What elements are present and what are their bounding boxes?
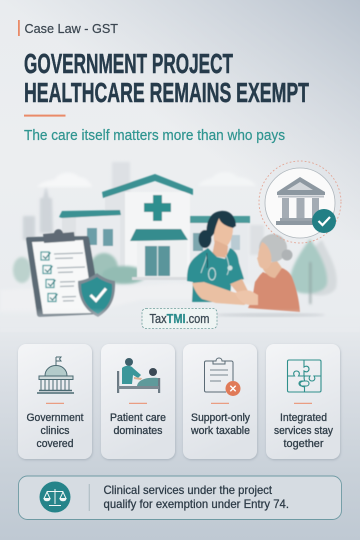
- title underline accent: [24, 115, 66, 117]
- banner text: [104, 483, 289, 511]
- label: Support-only: [191, 412, 250, 424]
- label: Patient care: [110, 412, 166, 424]
- label: work taxable: [190, 425, 250, 437]
- white circle: [265, 168, 335, 238]
- label: [26, 412, 84, 450]
- government badge: [259, 161, 341, 243]
- banner text: qualify for exemption under Entry 74.: [104, 497, 289, 511]
- conclusion banner: [18, 476, 342, 520]
- banner text: Clinical services under the project: [104, 483, 273, 497]
- shield: [78, 273, 115, 317]
- title: [24, 48, 309, 108]
- divider: [211, 403, 229, 404]
- hospital: main block: [102, 174, 193, 280]
- label: [274, 412, 333, 450]
- label: covered: [36, 438, 74, 450]
- card: Government clinics covered: [18, 344, 92, 459]
- divider: [129, 403, 147, 404]
- label: clinics: [40, 425, 70, 437]
- check badge: [312, 209, 336, 233]
- card: Support-only work taxable: [183, 344, 257, 459]
- nurse: [187, 211, 250, 305]
- ground path: [0, 283, 260, 312]
- temple icon: [276, 177, 325, 225]
- divider: [294, 403, 312, 404]
- label: Integrated: [280, 412, 327, 424]
- label: services stay: [274, 425, 333, 437]
- hospital: entrance: [130, 229, 190, 280]
- subtitle: The care itself matters more than who pays: [24, 127, 285, 144]
- icon: clipboard with cross: [204, 358, 240, 396]
- icon: scales of justice: [40, 482, 70, 512]
- hospital: left wing: [59, 210, 121, 272]
- bushes: [90, 253, 146, 284]
- label: Government: [26, 412, 84, 424]
- icon: government building: [37, 357, 74, 393]
- bottom fade: [0, 308, 360, 332]
- tree: [290, 239, 337, 304]
- hospital: right wing: [187, 216, 250, 280]
- brand label: TaxTMI.com: [142, 308, 217, 328]
- card: Patient care dominates: [101, 344, 175, 459]
- card: Integrated services stay together: [266, 344, 340, 459]
- elderly patient: [235, 234, 300, 312]
- label: [190, 412, 250, 437]
- title: GOVERNMENT PROJECT: [24, 48, 233, 79]
- bushes left: [13, 257, 31, 283]
- divider: [88, 484, 91, 511]
- label: [110, 412, 166, 437]
- icon: patient in bed: [117, 358, 160, 393]
- illustration: healthcare scene: [0, 162, 360, 332]
- kicker: Case Law - GST: Case Law - GST: [24, 21, 118, 36]
- clipboard with checklist: [26, 229, 102, 317]
- dashed ring: [259, 161, 341, 243]
- divider: [46, 403, 64, 404]
- floor shadow: [215, 313, 325, 317]
- brand label: TaxTMI.com: TaxTMI.com: [150, 311, 210, 326]
- cloud: [37, 173, 92, 187]
- label: dominates: [114, 425, 163, 437]
- icon: puzzle: [288, 360, 321, 392]
- city skyline: [23, 162, 264, 255]
- label: together: [284, 438, 324, 450]
